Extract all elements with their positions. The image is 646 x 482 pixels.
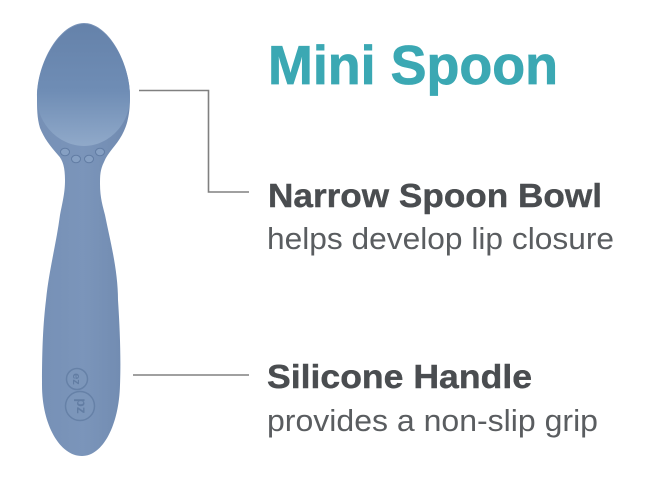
spoon illustration [37, 23, 130, 456]
embossed logo [66, 368, 94, 420]
text: non-slip grip: provides a non-slip grip [267, 403, 598, 438]
embossed logo: pz [74, 398, 90, 414]
leader line: bowl [139, 90, 249, 192]
spoon body [37, 23, 130, 456]
leader line: handle [133, 374, 249, 376]
text: lip closure: helps develop lip closure [267, 221, 614, 256]
grip dots [60, 148, 104, 163]
embossed logo: ez [70, 373, 82, 385]
heading: silicone handle: Silicone Handle [267, 358, 532, 395]
title: Mini Spoon [268, 34, 558, 96]
spoon bowl [37, 24, 130, 146]
heading: narrow spoon bowl: Narrow Spoon Bowl [268, 177, 602, 214]
